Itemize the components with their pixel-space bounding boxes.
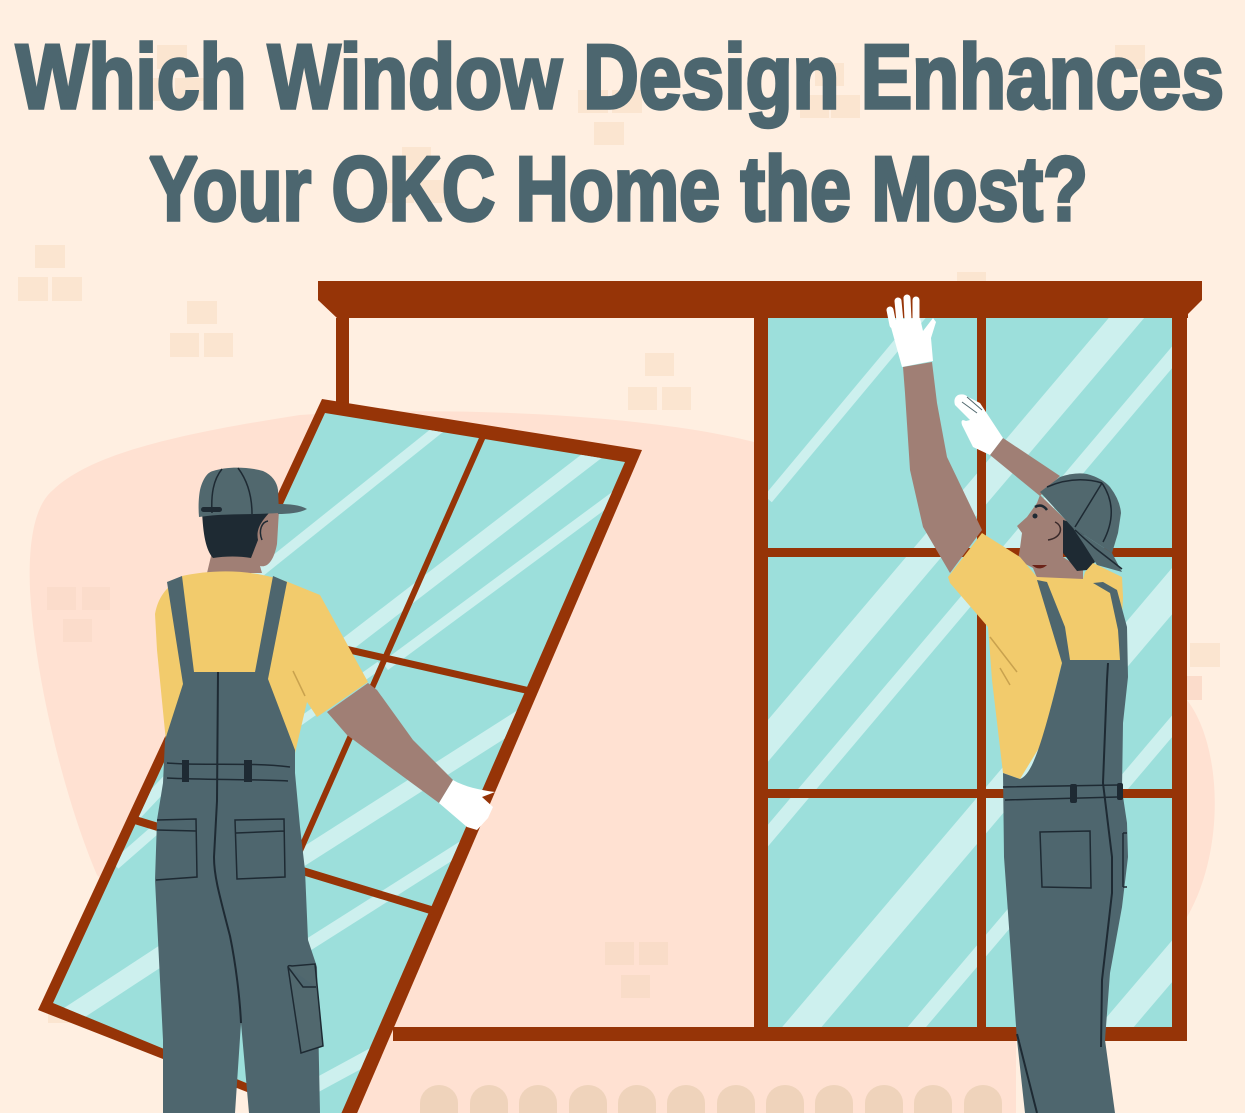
seams bbox=[1017, 663, 1112, 1113]
hair bbox=[1063, 520, 1095, 571]
tilted glass bbox=[53, 413, 625, 1113]
bottom arches bbox=[420, 1085, 1002, 1113]
glass reflections bbox=[768, 318, 1172, 1027]
far glove bbox=[954, 394, 1003, 455]
shirt bbox=[948, 533, 1123, 779]
left worker arm bbox=[327, 683, 453, 803]
glass panes bbox=[768, 318, 1172, 1027]
seams bbox=[214, 672, 241, 1023]
background blob bbox=[30, 411, 1215, 1113]
hair bbox=[202, 510, 272, 558]
left worker glove bbox=[439, 780, 495, 830]
tilted reflections bbox=[60, 420, 630, 1086]
tilted frame bbox=[38, 399, 642, 1113]
overalls bbox=[1003, 580, 1128, 1113]
ear bbox=[260, 521, 268, 540]
shirt crease bbox=[293, 671, 305, 696]
left worker overalls bbox=[155, 576, 323, 1113]
title bbox=[16, 27, 1224, 240]
tilted mullions bbox=[135, 434, 530, 1100]
neck and face bbox=[207, 510, 279, 573]
cap bbox=[1040, 473, 1122, 572]
installed window bbox=[318, 281, 1202, 1041]
tilted window being carried bbox=[38, 399, 642, 1113]
left worker shirt bbox=[155, 571, 368, 753]
worker on left, seen from behind bbox=[155, 468, 495, 1113]
worker on right, reaching up bbox=[889, 298, 1128, 1113]
far arm bbox=[990, 438, 1060, 496]
head bbox=[1017, 495, 1083, 580]
cap bbox=[199, 468, 307, 517]
shirt crease bbox=[990, 637, 1017, 685]
raised glove bbox=[889, 298, 936, 367]
raised arm bbox=[903, 362, 982, 573]
frame bbox=[318, 281, 1202, 1041]
face details bbox=[1032, 506, 1060, 568]
